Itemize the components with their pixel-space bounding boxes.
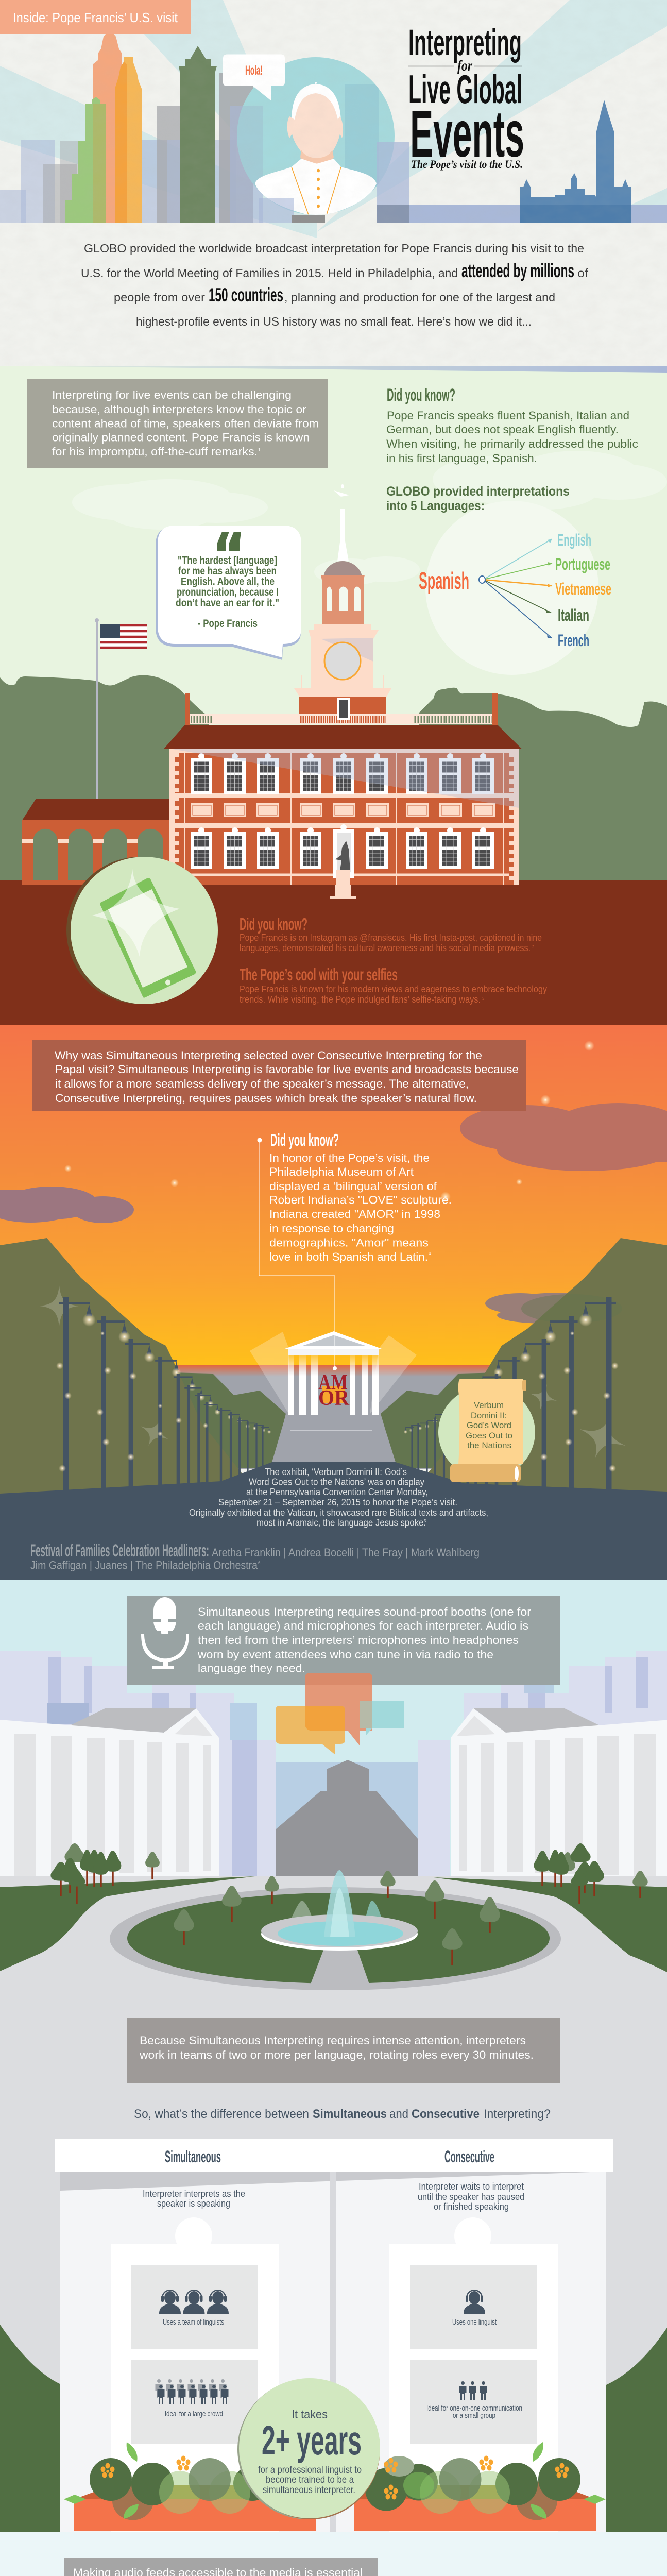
simultaneous box 2: work in teams of two or more per language, rotating roles every 30 minutes. <box>139 2048 534 2061</box>
descriptions: until the speaker has paused <box>418 2192 524 2202</box>
scroll: Goes Out to <box>466 1431 512 1440</box>
interpreting box <box>32 1040 526 1111</box>
did you know: instagram: languages, demonstrated his cultural awareness and his social media prowess. <box>240 943 531 953</box>
spotlights <box>250 1332 417 1414</box>
did you know: amor: Philadelphia Museum of Art <box>269 1165 414 1178</box>
difference question: and <box>389 2107 408 2121</box>
intro text: U.S. for the World Meeting of Families in 2015. Held in Philadelphia, and <box>81 266 458 280</box>
callout: 2+ years: simultaneous interpreter. <box>263 2485 355 2496</box>
top windows <box>191 753 494 794</box>
did you know: languages: Pope Francis speaks fluent Spanish, Italian and <box>387 409 629 422</box>
did you know box: challenge: originally planned content. Pope Francis is known <box>52 431 310 444</box>
lavender shade <box>169 749 519 808</box>
step line <box>290 1430 372 1431</box>
did you know: languages: When visiting, he primarily addressed the public <box>386 437 638 450</box>
gray horizon <box>155 1365 515 1469</box>
quote text: "The hardest [language] <box>178 554 277 567</box>
small group <box>426 2381 522 2420</box>
oval lawn <box>110 1887 561 1990</box>
did you know: instagram <box>240 914 542 953</box>
mic box: Simultaneous Interpreting requires sound-proof booths (one for <box>198 1605 531 1618</box>
difference question <box>134 2107 551 2121</box>
quote text: pronunciation, because I <box>177 586 279 598</box>
did you know: amor: in response to changing <box>269 1222 394 1235</box>
section: the museum campus <box>0 1580 667 2532</box>
table headers: Simultaneous <box>165 2147 221 2166</box>
right hall <box>451 1708 667 1886</box>
media box <box>64 2558 378 2576</box>
selfies text <box>240 965 547 1005</box>
pale skyline blocks <box>0 73 667 223</box>
pope figure <box>255 82 377 215</box>
language diagram: Spanish <box>419 567 469 594</box>
large crowd: Ideal for a large crowd <box>165 2410 223 2418</box>
hills <box>0 675 667 880</box>
planter boxes <box>74 2485 596 2531</box>
did you know box: challenge <box>27 379 328 468</box>
mic box <box>127 1596 560 1685</box>
door and statue <box>330 824 356 899</box>
one linguist: Uses one linguist <box>452 2318 497 2327</box>
descriptions: or finished speaking <box>434 2201 509 2212</box>
sun rays <box>0 0 667 238</box>
selfies text: trends. While visiting, the Pope indulged fans’ selfie-taking ways. <box>240 994 481 1005</box>
planters <box>64 2442 606 2531</box>
intro text: highest-profile events in US history was no small feat. Here’s how we did it... <box>136 315 532 328</box>
hero skyline illustration <box>0 0 667 238</box>
intro text: people from over <box>114 291 205 304</box>
scroll: Verbum <box>474 1400 504 1410</box>
festival headliners: 6 <box>258 1561 261 1565</box>
interpreting box: Consecutive Interpreting, requires pauses which break the speaker’s natural flow. <box>55 1092 477 1105</box>
did you know: amor: Indiana created "AMOR" in 1998 <box>269 1208 440 1221</box>
quote text: English. Above all, the <box>181 576 275 587</box>
callout: 2+ years: It takes <box>292 2408 328 2421</box>
did you know: instagram: 2 <box>532 945 535 950</box>
scroll: the Nations <box>467 1440 511 1450</box>
main hall <box>164 725 522 899</box>
floating sparks <box>64 1041 594 1202</box>
title: for <box>457 57 472 74</box>
difference question: Interpreting? <box>484 2107 551 2121</box>
table headers <box>165 2147 494 2166</box>
middle windows <box>191 803 495 817</box>
exhibit text: most in Aramaic, the language Jesus spoke. <box>256 1518 426 1528</box>
large crowd <box>156 2379 229 2418</box>
simultaneous box 2 <box>127 2018 560 2083</box>
translucent stars <box>40 1285 633 1466</box>
did you know: languages: Did you know? <box>387 385 455 405</box>
selfies text: The Pope’s cool with your selfies <box>240 965 398 984</box>
leaves <box>64 2442 606 2519</box>
mic box: worn by event attendees who can tune in via radio to the <box>197 1648 493 1661</box>
title: Live Global <box>408 66 522 112</box>
title: Events <box>410 97 524 171</box>
exhibit text: at the Pennsylvania Convention Center Monday, <box>246 1487 428 1497</box>
speech bubble: Hola <box>223 55 285 101</box>
lower windows <box>191 827 494 869</box>
fountain <box>261 1870 418 1951</box>
clouds <box>0 1103 667 1324</box>
quote bubble <box>156 526 301 660</box>
orange tower <box>93 26 122 223</box>
left wing <box>22 799 169 885</box>
gray distant building <box>276 1760 418 1876</box>
did you know: languages: GLOBO provided interpretations <box>386 484 570 499</box>
did you know box: challenge: for his impromptu, off-the-cuff remarks. <box>52 445 258 458</box>
did you know: amor: 4 <box>429 1251 431 1256</box>
comparison table <box>55 2139 613 2532</box>
callout: 2+ years: become trained to be a <box>266 2475 354 2485</box>
did you know box: challenge: because, although interpreters know the topic or <box>52 403 306 416</box>
street lamps left <box>56 1297 271 1504</box>
AMOR sculpture <box>318 1371 350 1410</box>
pope portrait circle <box>230 57 395 223</box>
small group: Ideal for one-on-one communication <box>426 2404 522 2413</box>
quote text <box>176 554 279 630</box>
team of linguists: Uses a team of linguists <box>163 2318 224 2327</box>
festival headliners: Aretha Franklin | Andrea Bocelli | The Fray | Mark Wahlberg <box>212 1546 480 1559</box>
did you know: amor: In honor of the Pope’s visit, the <box>269 1151 430 1164</box>
speech bubbles <box>276 1673 404 1755</box>
lawn right <box>434 1877 667 1972</box>
team of linguists <box>159 2290 229 2327</box>
festival headliners: Festival of Families Celebration Headliners: <box>30 1541 209 1561</box>
mic box: then fed from the interpreters’ microphones into headphones <box>198 1634 519 1647</box>
exhibit text: 5 <box>424 1519 426 1523</box>
festival headliners <box>30 1541 480 1571</box>
small group: or a small group <box>453 2411 495 2420</box>
interpreting box: Why was Simultaneous Interpreting selected over Consecutive Interpreting for the <box>55 1049 482 1062</box>
difference question: Simultaneous <box>313 2107 387 2121</box>
quote text: for me has always been <box>178 565 277 577</box>
did you know: amor: Did you know? <box>270 1130 339 1149</box>
did you know: languages: into 5 Languages: <box>386 499 485 513</box>
trees <box>50 1843 648 1965</box>
did you know: languages: German, but does not speak English fluently. <box>386 423 619 436</box>
difference question: Consecutive <box>412 2107 480 2121</box>
quote mark <box>217 532 241 551</box>
road up to museum <box>272 1415 396 1462</box>
section: Independence Hall <box>0 366 667 1025</box>
intro text: of <box>577 266 589 280</box>
exhibit text: The exhibit, ‘Verbum Domini II: God’s <box>265 1467 407 1477</box>
language diagram: Portuguese <box>555 555 610 573</box>
title: Interpreting <box>408 23 522 63</box>
did you know: amor: demographics. "Amor" means <box>269 1236 429 1249</box>
descriptions: Interpreter waits to interpret <box>419 2181 524 2192</box>
did you know: instagram: Pope Francis is on Instagram as @fransiscus. His first Insta-post, captioned in nine <box>240 933 542 943</box>
simultaneous box 2: Because Simultaneous Interpreting requires intense attention, interpreters <box>140 2034 526 2047</box>
paper background: hero <box>0 0 667 367</box>
foliage <box>90 2456 580 2520</box>
descriptions: speaker is speaking <box>157 2198 230 2209</box>
scroll <box>438 1379 535 1482</box>
balustrade <box>185 693 498 725</box>
section: living room <box>0 2532 667 2576</box>
did you know: languages: in his first language, Spanish. <box>386 452 537 465</box>
did you know: amor <box>258 1130 452 1391</box>
label: inside <box>0 0 191 34</box>
dark green tower <box>179 46 217 223</box>
museum temple <box>285 1278 382 1415</box>
did you know: amor: love in both Spanish and Latin. <box>269 1250 428 1263</box>
difference question: So, what’s the difference between <box>134 2107 309 2121</box>
road in foreground <box>0 1462 667 1581</box>
tiles <box>131 2265 537 2444</box>
intro text: GLOBO provided the worldwide broadcast interpretation for Pope Francis during his visit to the <box>84 242 584 255</box>
background buildings <box>0 1651 667 1883</box>
phone circle <box>66 857 218 1004</box>
flowers <box>101 2455 569 2500</box>
clouds <box>72 451 667 585</box>
large pale circle <box>425 501 598 675</box>
intro text: , planning and production for one of the largest and <box>284 291 555 304</box>
callout: 2+ years: for a professional linguist to <box>258 2465 362 2476</box>
flag and pole <box>95 618 147 872</box>
callout: 2+ years: 2+ years <box>262 2417 362 2463</box>
intro text: 150 countries <box>209 284 283 306</box>
did you know: languages <box>386 385 638 513</box>
table headers: Consecutive <box>444 2147 494 2166</box>
inner hills <box>170 1372 500 1494</box>
mic box: each language) and microphones for each interpreter. Audio is <box>198 1619 528 1632</box>
plaza <box>0 1876 667 2532</box>
lavender wedge <box>0 366 667 373</box>
white cards <box>111 2217 558 2532</box>
AMOR sculpture: OR <box>318 1386 350 1410</box>
central sky rect <box>276 1762 418 1876</box>
exhibit text: Word Goes Out to the Nations’ was on display <box>249 1477 424 1487</box>
quote text: don’t have an ear for it." <box>176 597 279 609</box>
did you know: instagram: Did you know? <box>240 914 307 934</box>
quote text: - Pope Francis <box>198 618 258 630</box>
mic box: language they need. <box>198 1662 305 1674</box>
city hall base <box>520 205 631 223</box>
scroll: God’s Word <box>467 1420 511 1430</box>
intro text: attended by millions <box>461 260 574 281</box>
did you know: amor: Robert Indiana’s "LOVE" sculpture. <box>269 1193 452 1207</box>
did you know box: challenge: Interpreting for live events can be challenging <box>52 388 292 401</box>
sparkle <box>92 869 180 957</box>
microphone icon <box>141 1597 189 1669</box>
descriptions: Interpreter interprets as the <box>143 2189 245 2199</box>
selfies text: Pope Francis is known for his modern views and eagerness to embrace technology <box>240 984 547 994</box>
title <box>408 23 524 171</box>
scroll: Domini II: <box>471 1411 507 1420</box>
paper grain <box>0 0 667 367</box>
selfies text: 3 <box>482 996 485 1001</box>
lawn left <box>0 1876 255 1971</box>
green tower <box>65 97 106 223</box>
interpreting box: it allows for a more seamless delivery of the speaker’s message. The alternative, <box>55 1077 469 1090</box>
did you know: amor: displayed a ‘bilingual’ version of <box>269 1180 437 1193</box>
language diagram: Vietnamese <box>555 580 611 598</box>
green overlap <box>93 104 106 223</box>
interpreting box: Papal visit? Simultaneous Interpreting is favorable for live events and broadcasts because <box>55 1063 519 1076</box>
language diagram <box>419 531 611 650</box>
orange overlap <box>115 61 127 223</box>
title: The Pope’s visit to the U.S. <box>411 158 523 171</box>
exhibit text: Originally exhibited at the Vatican, it showcased rare Biblical texts and artifacts, <box>189 1507 488 1518</box>
speech bubble: Hola: Hola! <box>245 63 263 78</box>
lower green corners <box>0 2325 667 2532</box>
front blocks <box>259 142 409 223</box>
one linguist <box>452 2290 497 2327</box>
language diagram: Italian <box>558 606 589 624</box>
label: inside: Inside: Pope Francis’ U.S. visit <box>13 10 178 25</box>
callout: 2+ years <box>237 2378 380 2519</box>
intro text <box>81 242 589 328</box>
descriptions <box>143 2181 524 2212</box>
did you know box: challenge: content ahead of time, speakers often deviate from <box>52 417 319 430</box>
street lamps right <box>404 1297 619 1504</box>
section: sunset parkway <box>0 1025 667 1581</box>
olive hills <box>0 1238 667 1494</box>
city hall silhouette <box>520 100 631 223</box>
AMOR sculpture: AM <box>318 1371 348 1395</box>
yellow tower <box>115 57 142 223</box>
right cloud over hill <box>521 1294 622 1323</box>
ground <box>0 880 667 1025</box>
exhibit text: September 21 – September 26, 2015 to honor the Pope’s visit. <box>218 1497 457 1507</box>
festival headliners: Jim Gaffigan | Juanes | The Philadelphia Orchestra <box>30 1559 258 1571</box>
language diagram: English <box>557 531 591 549</box>
exhibit text <box>189 1467 488 1528</box>
left hall <box>0 1708 219 1886</box>
did you know box: challenge: 1 <box>258 447 261 452</box>
clock tower <box>294 484 391 714</box>
language diagram: French <box>558 631 589 650</box>
